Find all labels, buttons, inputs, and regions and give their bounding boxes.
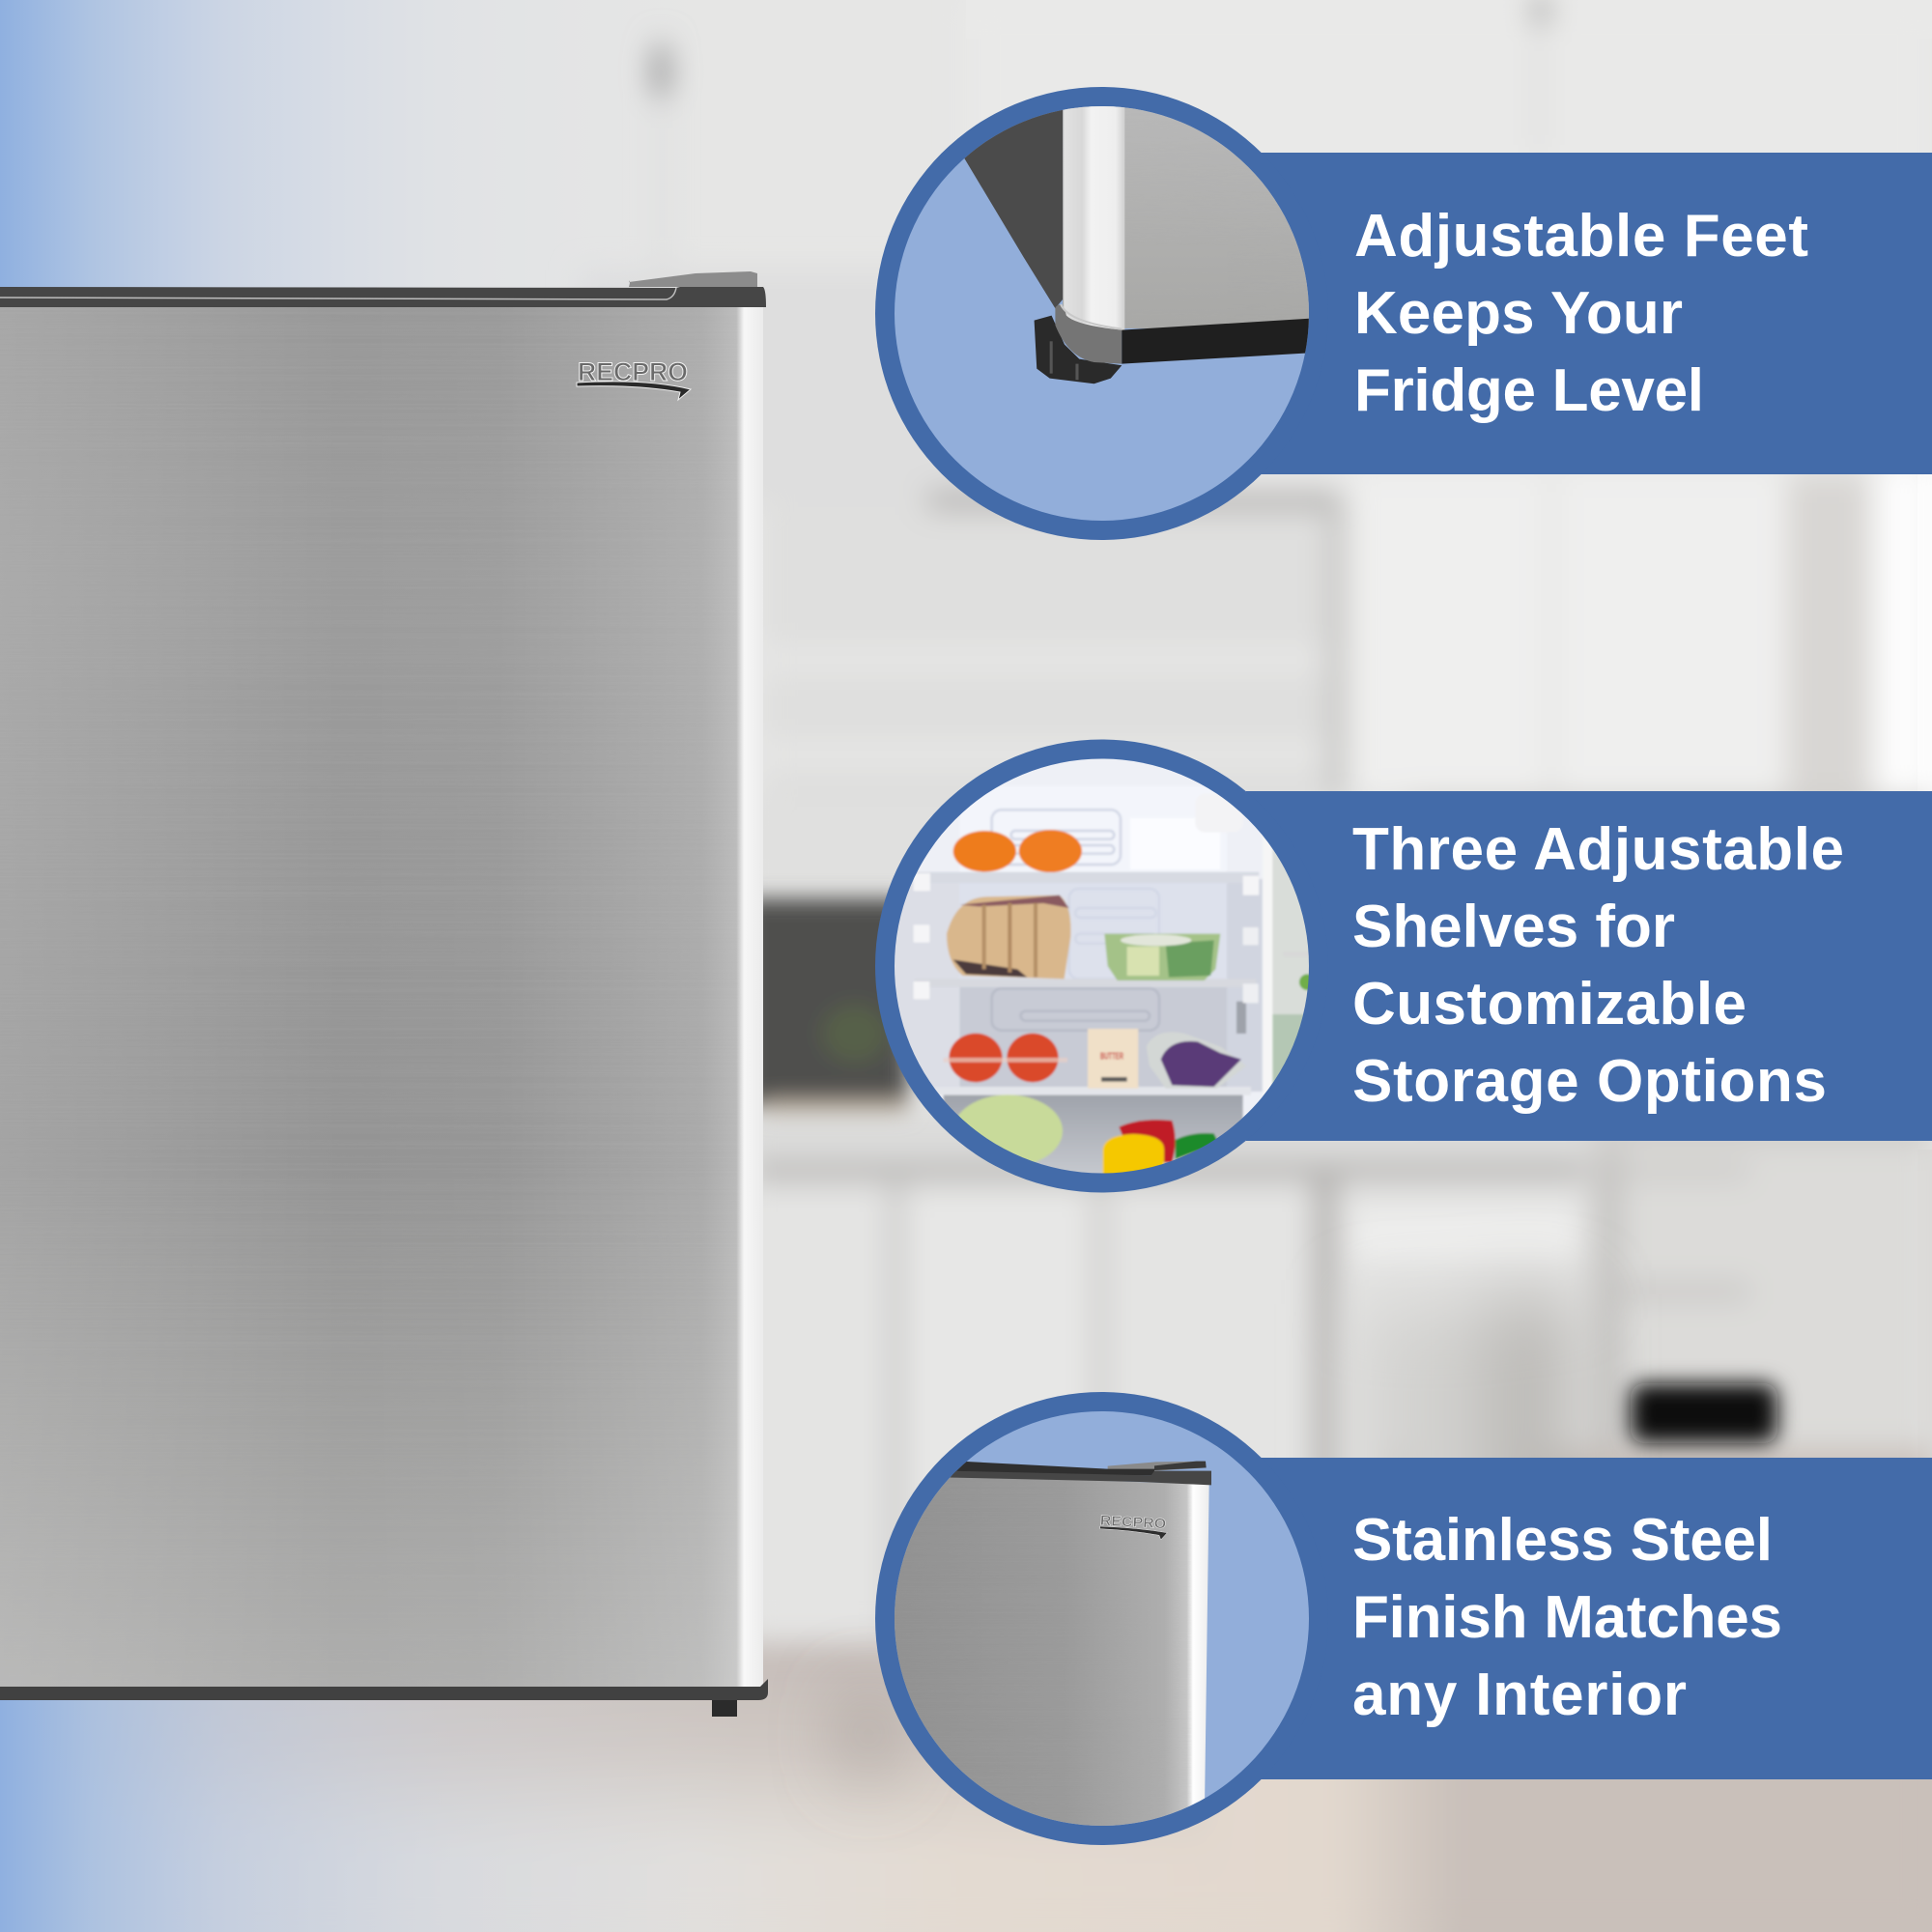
hinge: [629, 271, 757, 287]
feature text: [1352, 816, 1844, 1115]
feature text: [1354, 203, 1808, 424]
feature text: Shelves for: [1352, 894, 1675, 960]
top trim: [0, 287, 766, 307]
refrigerator door: [0, 271, 768, 1717]
banner: [1246, 791, 1932, 1141]
inset: fridge interior: [892, 756, 1316, 1176]
stainless door panel: [0, 305, 763, 1689]
inset: fridge foot close-up: [895, 84, 1316, 522]
banner: [1246, 153, 1932, 474]
panel: adjustable feet: [875, 84, 1932, 540]
brand logo: RECPRO: [578, 357, 688, 386]
feature text: any Interior: [1352, 1662, 1687, 1728]
ring: [875, 87, 1328, 540]
feature text: Keeps Your: [1354, 280, 1683, 347]
banner: [1246, 1458, 1932, 1779]
left blue gradient wash: [0, 0, 753, 1932]
feature text: Stainless Steel: [1352, 1507, 1773, 1574]
inset: door close-up: [889, 1410, 1310, 1833]
fridge foot: [712, 1698, 737, 1717]
ring: [875, 1392, 1328, 1845]
feature text: Finish Matches: [1352, 1584, 1782, 1651]
feature text: Fridge Level: [1354, 357, 1704, 424]
bottom trim: [0, 1679, 768, 1700]
panel: stainless steel finish: [875, 1392, 1932, 1845]
feature text: Customizable: [1352, 971, 1747, 1037]
inset: door close-up: RECPRO: [1099, 1514, 1167, 1532]
trim highlight: [0, 288, 676, 299]
feature text: Adjustable Feet: [1354, 203, 1808, 270]
inset: fridge interior: BUTTER: [1100, 1052, 1123, 1063]
panel: adjustable shelves: [875, 740, 1932, 1192]
ring: [875, 740, 1328, 1192]
feature text: Three Adjustable: [1352, 816, 1844, 883]
brand logo: [577, 357, 691, 400]
feature text: Storage Options: [1352, 1048, 1827, 1115]
feature text: [1352, 1507, 1782, 1728]
